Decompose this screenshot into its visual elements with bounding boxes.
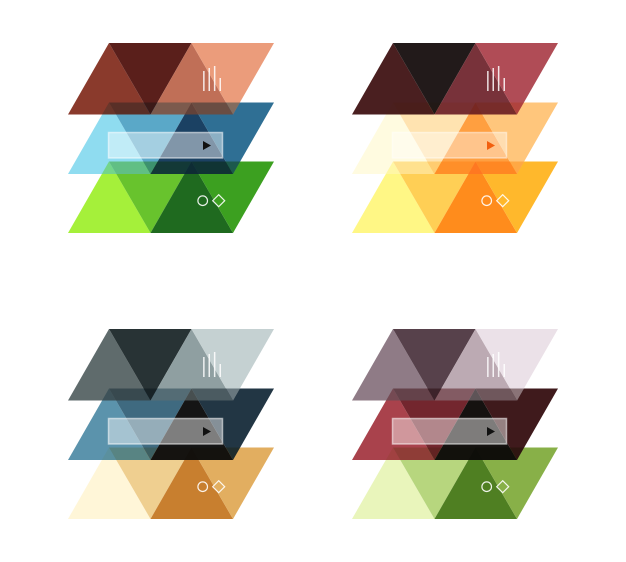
maroon top banner: [352, 43, 558, 114]
icon: bar chart: [487, 66, 505, 91]
button bar: [108, 418, 222, 444]
red top banner: [68, 43, 274, 114]
icon: bar chart: [203, 66, 221, 91]
icon: play arrow: [203, 141, 211, 150]
icon: play arrow: [487, 427, 495, 436]
green showing through crimson: [386, 448, 524, 460]
infographic canvas: [68, 43, 558, 519]
blue showing through slate: [102, 388, 240, 400]
icon: bar chart: [203, 352, 221, 377]
icon: circle and diamond: [482, 195, 509, 207]
panel: red blue green banner stack: [68, 43, 274, 233]
button bar: [392, 132, 506, 158]
blue middle banner: [68, 102, 274, 174]
cream showing through maroon: [428, 102, 524, 114]
crimson middle banner: [352, 388, 558, 460]
icon: circle and diamond: [198, 481, 225, 493]
crimson showing through mauve: [386, 388, 524, 400]
blue showing through red: [102, 102, 240, 114]
yellow bottom banner: [352, 162, 558, 233]
icon: bar chart: [487, 352, 505, 377]
panel: slate blue tan banner stack: [68, 329, 274, 519]
slate top banner: [68, 329, 274, 400]
icon: play arrow: [203, 427, 211, 436]
panel: maroon orange yellow banner stack: [352, 43, 558, 233]
mauve top banner: [352, 329, 558, 400]
panel: mauve crimson green banner stack: [352, 329, 558, 519]
cream middle banner: [352, 102, 558, 174]
green showing through blue: [102, 162, 240, 174]
button bar: [392, 418, 506, 444]
button bar: [108, 132, 222, 158]
yellow showing through cream: [386, 162, 524, 174]
blue middle banner: [68, 388, 274, 460]
icon: circle and diamond: [198, 195, 225, 207]
tan bottom banner: [68, 448, 274, 519]
icon: play arrow: [487, 141, 495, 150]
tan showing through blue: [102, 448, 240, 460]
green bottom banner: [68, 162, 274, 233]
green bottom banner: [352, 448, 558, 519]
icon: circle and diamond: [482, 481, 509, 493]
